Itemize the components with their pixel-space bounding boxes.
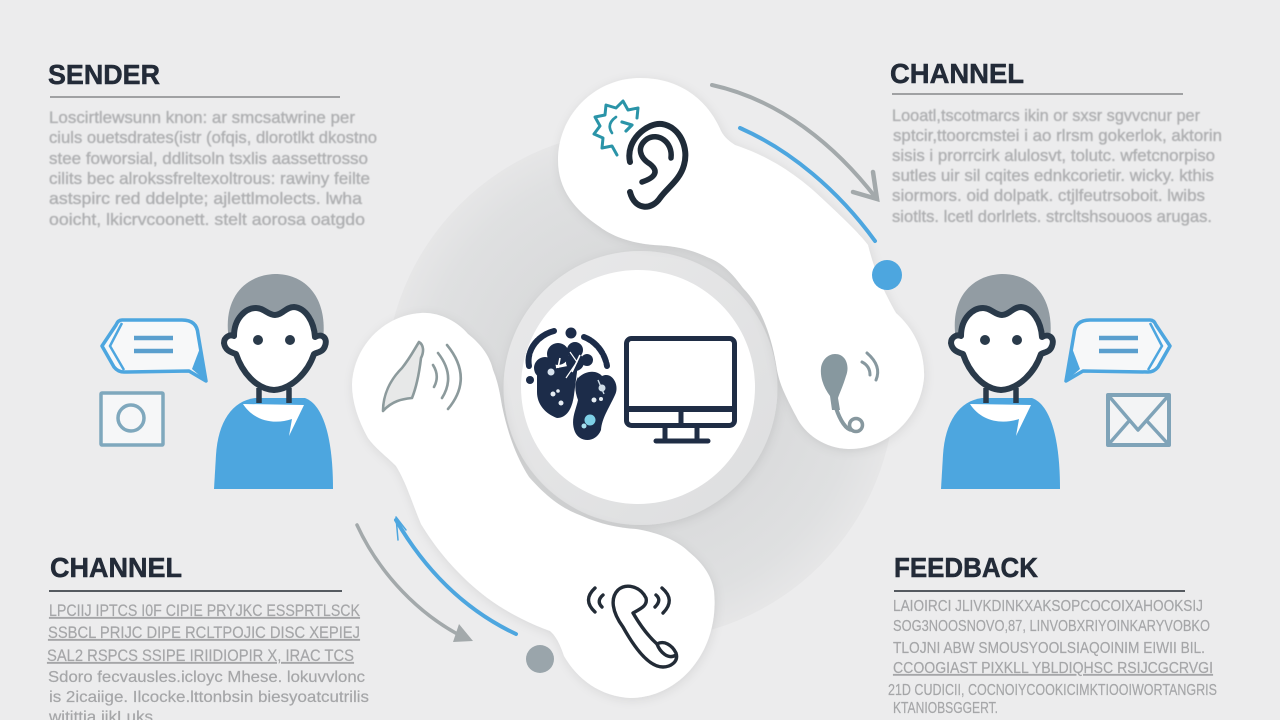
- eyes: [980, 335, 1022, 345]
- dot: grey: [526, 645, 554, 673]
- icon: left speech bubble: [102, 320, 206, 381]
- collar: [970, 404, 1031, 436]
- arrow: top grey: [712, 85, 877, 199]
- text block: sender body: ciuls ouetsdrates(istr (ofqis, dlorotlkt dkostno: [49, 128, 377, 147]
- icon: brain and ear cluster: [526, 328, 617, 440]
- arrow: bottom blue: [396, 517, 516, 634]
- centre ring: [504, 251, 778, 525]
- panel: feedback: [888, 552, 1217, 717]
- body: [214, 398, 333, 489]
- text block: channel top body: siormors. oid dolpatk. ctjlfeutrsoboit. lwibs: [892, 186, 1205, 205]
- text block: feedback body: CCOOGIAST PIXKLL YBLDIQHSC RSIJCGCRVGI: [893, 660, 1213, 677]
- text block: channel top body: sptcir,ttoorcmstei i ao rlrsm gokerlok, aktorin: [893, 126, 1222, 145]
- heading: feedback: FEEDBACK: [894, 552, 1038, 583]
- text block: channel top body: sutles uir sil cqites ednkcorietir. wicky. kthis: [892, 166, 1214, 185]
- hair: [228, 274, 324, 340]
- text block: sender body: stee foworsial, ddlitsoln tsxlis aassettrosso: [49, 149, 368, 168]
- centre white circle: [521, 270, 755, 504]
- text block: feedback body: SOG3NOOSNOVO,87, LINVOBXRIYOINKARYVOBKO: [893, 618, 1210, 635]
- icon: speaking hand with sound waves: [383, 342, 461, 411]
- text block: channel top body: [892, 106, 1222, 226]
- gear: [594, 101, 638, 155]
- panel: sender: [48, 59, 377, 229]
- heading: sender: SENDER: [48, 59, 160, 90]
- person: receiver: [941, 274, 1060, 489]
- text block: sender body: Loscirtlewsunn knon: ar smcsatwrine per: [49, 108, 355, 127]
- text block: channel bottom body: [47, 601, 369, 720]
- icon: telephone with signal: [588, 586, 677, 667]
- icon: ear with gear: [594, 101, 685, 207]
- text block: sender body: ooicht, lkicrvcoonett. stelt aorosa oatgdo: [49, 210, 365, 229]
- text block: feedback body: LAIOIRCI JLIVKDINKXAKSOPCOCOIXAHOOKSIJ: [893, 598, 1203, 615]
- text block: channel bottom body: is 2icaiige. Ilcocke.lttonbsin biesyoatcutrilis: [49, 689, 369, 706]
- text block: feedback body: TLOJNI ABW SMOUSYOOLSIAQOINIM EIWII BIL.: [893, 640, 1205, 657]
- hair: [955, 274, 1051, 340]
- neck: [986, 388, 1016, 403]
- icon: desktop monitor: [626, 338, 734, 441]
- face: [224, 307, 326, 390]
- text block: channel bottom body: LPCIIJ IPTCS I0F CIPIE PRYJKC ESSPRTLSCK: [49, 601, 361, 620]
- neck: [259, 388, 289, 403]
- icon: photo box: [101, 393, 163, 445]
- text block: channel bottom body: Sdoro fecvausles.icloyc Mhese. lokuvvlonc: [48, 669, 365, 686]
- text block: sender body: cilits bec alrokssfreltexoltrous: rawiny feilte: [49, 169, 370, 188]
- icon: microphone with cord: [821, 353, 878, 432]
- text block: channel top body: siotlts. lcetl dorlrlets. strcltshsouoos arugas.: [892, 207, 1212, 226]
- arrow: bottom grey: [357, 525, 473, 642]
- text block: sender body: [49, 108, 377, 229]
- icon: right speech bubble: [1066, 320, 1170, 381]
- text block: feedback body: [888, 598, 1217, 717]
- white swoosh: top right: [558, 78, 924, 449]
- panel: channel top: [890, 58, 1222, 226]
- large grey disc: [385, 130, 895, 640]
- body: [941, 398, 1060, 489]
- white swoosh: bottom left: [352, 313, 715, 698]
- text block: channel top body: Looatl,tscotmarcs ikin or sxsr sgvvcnur per: [892, 106, 1200, 125]
- text block: channel top body: sisis i prorrcirk alulosvt, tolutc. wfetcnorpiso: [892, 146, 1215, 165]
- heading: channel bottom: CHANNEL: [50, 552, 182, 583]
- face: [951, 307, 1053, 390]
- collar: [243, 404, 304, 436]
- panel: channel bottom: [47, 552, 369, 720]
- dot: blue: [872, 260, 902, 290]
- heading: channel top: CHANNEL: [890, 58, 1024, 89]
- text block: channel bottom body: SAL2 RSPCS SSIPE IRIIDIOPIR X, IRAC TCS: [47, 646, 354, 665]
- person: sender: [214, 274, 333, 489]
- arrow: top blue: [740, 128, 875, 241]
- eyes: [253, 335, 295, 345]
- text block: feedback body: KTANIOBSGGERT.: [893, 700, 998, 717]
- text block: channel bottom body: SSBCL PRIJC DIPE RCLTPOJIC DISC XEPIEJ: [48, 623, 360, 642]
- text block: sender body: astspirc red ddelpte; ajlettlmolects. lwha: [49, 189, 363, 208]
- icon: envelope: [1108, 395, 1169, 445]
